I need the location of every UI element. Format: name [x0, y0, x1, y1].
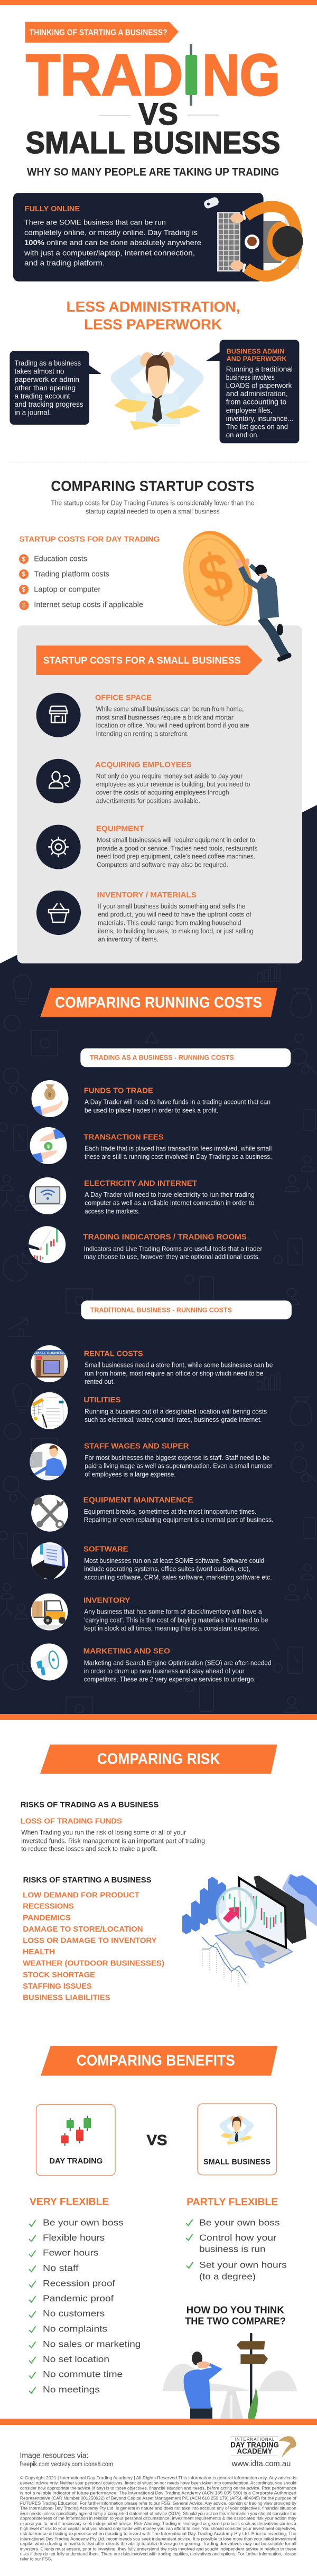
copyright disclaimer: FUTURES Trading Education. For further information please refer to our FSG. General Advice: Any advice, opinion or trading view provided by	[20, 2500, 297, 2506]
copyright disclaimer: appropriateness of the information in relation to your personal circumstance, investment requirements & the associated risk your action may	[20, 2516, 297, 2521]
item: inventory: INVENTORY	[83, 1596, 130, 1605]
item: acquiring employees	[36, 759, 250, 804]
icon: bills and pen	[31, 1392, 68, 1429]
intro text: startup capital needed to open a small business	[86, 508, 220, 515]
copyright disclaimer: expose you to, and if necessary seek independent advice. Risk Warning: Trading in leveraged or geared products such as derivatives carries a	[20, 2521, 296, 2526]
callout: trading paperwork: Trading as a business	[15, 359, 81, 367]
title: vs: VS	[138, 97, 178, 132]
item: inventory	[31, 1594, 268, 1632]
item: rental costs: RENTAL COSTS	[84, 1350, 143, 1359]
item: acquiring employees: employees as your revenue is building, but you need to	[96, 781, 250, 788]
callout: trading paperwork: takes almost no	[15, 368, 64, 376]
block: risks of starting a business: WEATHER (OUTDOOR BUSINESSES)	[23, 1959, 164, 1968]
item: office space: location or office. You will need upfront bond if you are	[96, 722, 249, 729]
label: trading running costs: TRADING AS A BUSINESS - RUNNING COSTS	[90, 1054, 234, 1062]
icon: gear	[36, 825, 81, 869]
body text: business involves	[226, 373, 275, 381]
block: risks of starting a business: BUSINESS LIABILITIES	[23, 1993, 110, 2002]
checklist: day trading benefits: No complaints	[43, 2324, 107, 2334]
body text: with just a computer/laptop, internet connection,	[24, 249, 195, 257]
body text: Running a traditional	[226, 365, 293, 373]
card: day trading: DAY TRADING	[49, 2157, 102, 2166]
item: inventory: Any business that has some form of stock/inventory will have a	[84, 1608, 262, 1616]
orange footer bar	[0, 2419, 317, 2425]
block: risks of trading: When Trading you run the risk of losing some or all of your	[21, 1829, 186, 1837]
heading: startup costs for day trading: STARTUP COSTS FOR DAY TRADING	[19, 536, 160, 544]
checklist: small business benefits	[186, 2217, 287, 2282]
body text	[24, 219, 201, 267]
orange divider bar	[0, 1714, 317, 1720]
item: inventory materials: end product, you will need to have the upfront costs of	[98, 911, 251, 919]
block: risks of starting a business: DAMAGE TO STORE/LOCATION	[23, 1925, 143, 1934]
banner: small business costs	[36, 645, 263, 675]
panel: startup costs for a small business	[17, 625, 302, 963]
icon: money bag in hand	[31, 1080, 69, 1119]
icon: basket	[36, 891, 81, 935]
list: day trading startup costs: Trading platform costs	[34, 570, 109, 579]
body text: and administration,	[226, 390, 288, 398]
item: electricity and internet: computer as well as a reliable internet connection in order to	[85, 1200, 254, 1207]
checklist: day trading benefits: No commute time	[43, 2369, 123, 2380]
heading: fully online: FULLY ONLINE	[25, 205, 80, 213]
block: risks of trading: RISKS OF TRADING AS A BUSINESS	[21, 1801, 158, 1810]
item: inventory materials: items, to building houses, to making food, or just selling	[98, 928, 254, 935]
callout: trading paperwork: other than opening	[15, 384, 76, 392]
item: staff wages and super: paid a living wage as well as superannuation. Even a small number	[85, 1463, 273, 1470]
item: software: include operating systems, office suites (word outlook, etc),	[84, 1566, 250, 1573]
item: marketing and seo: MARKETING AND SEO	[83, 1647, 170, 1656]
label: traditional running costs: TRADITIONAL BUSINESS - RUNNING COSTS	[90, 1306, 232, 1314]
item: trading indicators and rooms: Indicators and Live Trading Rooms are useful tools that a trader	[84, 1245, 262, 1252]
banner: comparing benefits: COMPARING BENEFITS	[77, 2052, 235, 2069]
heading: less administration	[67, 298, 240, 332]
header tag: THINKING OF STARTING A BUSINESS?	[30, 29, 167, 38]
item: rental costs	[31, 1345, 273, 1385]
item: inventory materials: If your small business builds something and sells the	[98, 903, 246, 910]
header tag	[25, 22, 179, 43]
item: equipment: Computers and software may also be required.	[97, 861, 228, 868]
logo: www.idta.com.au	[231, 2460, 291, 2468]
item: acquiring employees: Not only do you require money set aside to pay your	[96, 772, 243, 780]
copyright disclaimer: Representative (CAR Number 001250922) of Beyond Capital Asset Management P/L (ACN 610 259 179) (AFSL 484045) for the purpose of	[20, 2495, 297, 2500]
item: equipment: provide a good or service. Tradies need tools, restaurants	[97, 845, 257, 852]
item: inventory materials: materials. This could range from making household	[98, 919, 241, 926]
list: day trading startup costs: $	[22, 603, 26, 609]
icon: shop front: SMALL BUSINESS	[34, 1351, 65, 1355]
icon: candlesticks	[61, 2116, 91, 2146]
icon: money bag in hand: $	[48, 1092, 51, 1098]
item: software: SOFTWARE	[83, 1545, 128, 1554]
banner: comparing running costs: COMPARING RUNNING COSTS	[55, 994, 262, 1011]
item: marketing and seo	[31, 1644, 272, 1683]
item: office space: OFFICE SPACE	[95, 694, 152, 702]
block: risks of starting a business	[23, 1876, 164, 2002]
image credits: Image resources via:	[20, 2451, 89, 2460]
question heading: HOW DO YOU THINK	[187, 2305, 284, 2315]
item: trading indicators and rooms	[28, 1226, 262, 1263]
item: equipment: EQUIPMENT	[96, 825, 144, 833]
list: day trading startup costs: Education costs	[34, 555, 87, 564]
illustration: person at desk from above	[203, 196, 303, 276]
item: office space: While some small businesses can be run from home,	[96, 706, 244, 713]
logo: INTERNATIONAL	[235, 2437, 275, 2442]
heading: business admin: BUSINESS ADMIN	[227, 348, 284, 355]
item: staff wages and super	[30, 1442, 273, 1480]
item: software: accounting software, CRM, sales software, marketing software etc.	[84, 1573, 272, 1581]
item: inventory: kept in stock at all times, meaning this is a consistant expense.	[84, 1625, 259, 1632]
item: transaction fees: TRANSACTION FEES	[83, 1133, 164, 1141]
body text: 100% online and can be done absolutely anywhere	[24, 239, 201, 247]
checklist: day trading benefits: No staff	[43, 2263, 79, 2273]
body text: There are SOME business that can be run	[24, 219, 166, 227]
banner: comparing benefits	[41, 2046, 277, 2076]
title: trading	[26, 43, 280, 108]
item: inventory materials: INVENTORY / MATERIALS	[97, 891, 197, 900]
checklist: small business benefits: (to a degree)	[199, 2272, 256, 2282]
illustration: laptop chart and magnifier	[182, 1874, 317, 1987]
callout: trading paperwork: paperwork or admin	[15, 376, 79, 383]
body text: completely online, or mostly online. Day Trading is	[24, 229, 198, 237]
card: day trading	[36, 2104, 115, 2176]
checklist: small business benefits: Set your own hours	[199, 2260, 287, 2270]
list: day trading startup costs: $	[22, 557, 25, 563]
item: inventory materials: an inventory of items.	[98, 936, 158, 943]
icon: forklift	[31, 1594, 68, 1631]
icon: stressed man	[221, 2115, 253, 2144]
item: utilities: Running a business out of a designated location will bering costs	[85, 1408, 267, 1415]
body text: and a trading platform.	[24, 259, 105, 267]
icon: crossed wrenches	[31, 1495, 68, 1532]
icon: shop front	[31, 1345, 68, 1382]
icon: laptop with wifi	[29, 1177, 66, 1214]
checklist: day trading benefits: No sales or marketing	[43, 2339, 141, 2349]
body text: inventory, insurance...	[226, 415, 293, 423]
item: transaction fees: these are still a running cost involved in Day Trading as a business.	[85, 1153, 272, 1160]
banner: comparing risk	[40, 1745, 277, 1774]
item: funds to trade: A Day Trader will need to have funds in a trading account that can	[85, 1099, 271, 1106]
image credits: freepik.com vectezy.com icons8.com	[20, 2461, 113, 2468]
block: risks of starting a business: RECESSIONS	[23, 1902, 74, 1911]
heading: partly flexible: PARTLY FLEXIBLE	[187, 2196, 278, 2208]
item: marketing and seo: Marketing and Search Engine Optimisation (SEO) are often needed	[84, 1659, 272, 1666]
copyright disclaimer: risk tolerance & trading experience when deciding to invest with The International Day Trading Academy Pty Ltd. Prior to investing, The	[20, 2531, 296, 2536]
icon: people	[36, 759, 81, 803]
copyright disclaimer: risks if they do not fully understand them. There are risks involved with trading equities, derivatives and options. For further information, please	[20, 2551, 296, 2556]
copyright disclaimer: consider how appropriate the advice (if any) is to those objectives, financial situation and needs, before acting on the advice. Past performance	[20, 2485, 296, 2490]
checklist: day trading benefits: Be your own boss	[43, 2217, 124, 2227]
list: day trading startup costs: Internet setup costs if applicable	[34, 601, 143, 609]
item: rental costs: run from home, most require an office or shop which need to be	[85, 1370, 263, 1377]
icon: megaphone	[31, 1644, 68, 1681]
item: rental costs: Small businesses need a store front, while some businesses can be	[85, 1362, 273, 1369]
copyright disclaimer: refer to our FSG.	[20, 2556, 52, 2562]
icon: hands with coin	[30, 1127, 67, 1164]
checklist: day trading benefits	[29, 2217, 141, 2394]
item: utilities: such as electrical, water, council rates, business-grade internet.	[85, 1416, 262, 1423]
copyright disclaimer: high level of risk to your capital and you should only trade with money you can afford to lose. You should consider your investment objectives,	[20, 2526, 296, 2531]
checklist: small business benefits: Be your own boss	[199, 2217, 280, 2227]
checklist: small business benefits: Control how your	[199, 2233, 277, 2243]
block: risks of starting a business: RISKS OF STARTING A BUSINESS	[23, 1876, 152, 1885]
intro text: The startup costs for Day Trading Futures is considerably lower than the	[51, 500, 254, 507]
subtitle: WHY SO MANY PEOPLE ARE TAKING UP TRADING	[27, 166, 279, 179]
icon: mouse	[203, 196, 220, 210]
question heading: THE TWO COMPARE?	[185, 2316, 286, 2327]
copyright disclaimer: general advice only. Neither your personal objectives, financial situation nor needs have been taken into consideration. Accordingly, you should	[20, 2480, 296, 2486]
copyright disclaimer: &/or needs unless specifically agreed to by a completed statement of advice (SOA). Should you act on this information you should consider the	[20, 2511, 296, 2516]
banner: comparing running costs	[40, 988, 277, 1017]
panel: fully online	[13, 193, 264, 282]
block: risks of trading: LOSS OF TRADING FUNDS	[21, 1817, 122, 1825]
icon: candlestick chart	[28, 1226, 66, 1263]
block: risks of starting a business: PANDEMICS	[23, 1913, 71, 1922]
item: staff wages and super: STAFF WAGES AND SUPER	[84, 1442, 189, 1451]
item: electricity and internet: ELECTRICITY AND INTERNET	[84, 1179, 197, 1188]
heading: comparing startup costs: COMPARING STARTUP COSTS	[51, 477, 254, 494]
item: electricity and internet: access the markets.	[85, 1207, 139, 1215]
item: equipment maintanence	[31, 1495, 273, 1532]
item: equipment maintanence: Repairing or even replacing equipment is a normal part of business.	[84, 1516, 273, 1524]
block: risks of starting a business: LOW DEMAND FOR PRODUCT	[23, 1890, 139, 1899]
item: software: Most businesses run on at least SOME software. Software could	[84, 1557, 264, 1565]
banner: small business costs: STARTUP COSTS FOR A SMALL BUSINESS	[43, 655, 241, 666]
title: trading: I	[187, 48, 196, 107]
logo: ACADEMY	[237, 2448, 273, 2456]
list: day trading startup costs: Laptop or computer	[34, 585, 100, 594]
copyright disclaimer: is not a reliable indicator of future performance. The International Day Trading Academy (ACN 165 005 550) is a Corporate Authorized	[20, 2490, 296, 2496]
title: trading: NG	[202, 43, 280, 108]
item: funds to trade: FUNDS TO TRADE	[84, 1086, 153, 1095]
item: software	[31, 1542, 272, 1581]
item: inventory: 'carrying cost'. This is the cost of buying materials that need to be	[84, 1616, 268, 1624]
checklist: day trading benefits: No customers	[43, 2309, 105, 2319]
body text	[226, 365, 293, 439]
item: transaction fees: Each trade that is placed has transaction fees involved, while small	[85, 1145, 272, 1152]
copyright disclaimer: capital when dealing in markets that offer clients the ability to utilize leverage or gearing. Trading derivatives may not be suitable for all	[20, 2541, 296, 2546]
item: rental costs: rented out.	[85, 1378, 115, 1385]
item: office space	[36, 693, 249, 737]
illustration: person at signpost	[163, 2333, 297, 2419]
body text: on and on.	[226, 431, 259, 439]
block: risks of trading	[21, 1801, 205, 1853]
item: marketing and seo: in order to drum up new business and stay ahead of your	[84, 1668, 245, 1675]
heading: less administration: LESS PAPERWORK	[84, 316, 222, 332]
callout: trading paperwork	[10, 351, 101, 425]
block: risks of starting a business: LOSS OR DAMAGE TO INVENTORY	[23, 1936, 157, 1945]
callout: trading paperwork: in a journal.	[15, 409, 51, 417]
icon: hands with coin: $	[46, 1144, 50, 1150]
heading: less administration: LESS ADMINISTRATION,	[67, 298, 240, 315]
illustration: stressed man	[114, 350, 200, 430]
icon: store	[36, 693, 81, 737]
checklist: day trading benefits: Flexible hours	[43, 2233, 105, 2243]
heading: very flexible: VERY FLEXIBLE	[30, 2196, 109, 2207]
item: equipment maintanence: EQUIPMENT MAINTANENCE	[83, 1496, 193, 1505]
vs label: VS	[147, 2132, 167, 2148]
block: risks of trading: to reduce these losses and seek to make a profit.	[21, 1846, 157, 1853]
block: risks of starting a business: STOCK SHORTAGE	[23, 1970, 95, 1979]
icon: office worker	[30, 1443, 67, 1480]
copyright disclaimer: investors. Clients must ensure, prior to investing, they fully understand the risks involved and sought independent advice in relation to these	[20, 2546, 296, 2551]
card: small business: SMALL BUSINESS	[203, 2158, 271, 2167]
icon: laptop with invoice	[31, 1542, 68, 1580]
illustration: man pushing coin	[172, 522, 292, 662]
question heading	[185, 2305, 286, 2327]
item: utilities: UTILITIES	[83, 1396, 121, 1404]
item: transaction fees	[30, 1127, 272, 1164]
card: small business	[198, 2104, 277, 2175]
banner: comparing risk: COMPARING RISK	[97, 1750, 220, 1767]
item: electricity and internet	[29, 1177, 255, 1215]
item: utilities	[31, 1392, 267, 1429]
callout: trading paperwork: a trading account	[15, 392, 70, 400]
body text: The list goes on and	[226, 423, 288, 431]
item: acquiring employees: advertisments for positions available.	[96, 797, 200, 804]
item: trading indicators and rooms: TRADING INDICATORS / TRADING ROOMS	[83, 1233, 247, 1242]
intro text	[51, 500, 254, 515]
checklist: day trading benefits: Recession proof	[43, 2278, 115, 2288]
checklist: day trading benefits: Fewer hours	[43, 2248, 98, 2258]
item: inventory materials	[36, 891, 254, 943]
item: equipment	[36, 825, 257, 869]
checklist: day trading benefits: Pandemic proof	[43, 2293, 114, 2303]
top orange bar	[0, 0, 317, 5]
title: trading: TRAD	[26, 43, 183, 108]
item: office space: most small businesses require a brick and mortar	[96, 714, 234, 721]
item: marketing and seo: competitors. These are 2 very expensive services to undergo.	[84, 1676, 256, 1683]
item: electricity and internet: A Day Trader will need to have electricity to run their trading	[85, 1191, 255, 1198]
checklist: small business benefits: business is run	[199, 2244, 265, 2254]
dark running costs background	[0, 805, 317, 1714]
item: staff wages and super: For most businesses the biggest expense is staff. Staff need to be	[85, 1454, 270, 1462]
callout: trading paperwork: and tracking progress	[15, 400, 83, 408]
label: traditional running costs	[81, 1300, 292, 1319]
list: day trading startup costs: $	[22, 572, 25, 578]
copyright disclaimer: The International Day Trading Academy Pty Ltd. is general in nature and does not take into account any of your objectives, financial situation	[20, 2506, 296, 2511]
illustration: man pushing coin: $	[192, 538, 239, 614]
checklist: day trading benefits: No meetings	[43, 2384, 100, 2394]
item: equipment: need food prep equipment, cafe's need coffee machines.	[97, 853, 255, 860]
block: risks of starting a business: HEALTH	[23, 1947, 55, 1956]
body text: employee files,	[226, 406, 273, 414]
label: trading running costs	[80, 1048, 291, 1067]
title: small business: SMALL BUSINESS	[25, 126, 280, 160]
item: acquiring employees: ACQUIRING EMPLOYEES	[95, 761, 192, 769]
item: funds to trade: be used to place trades in order to seek a profit.	[85, 1107, 218, 1114]
list: day trading startup costs: $	[22, 587, 25, 593]
copyright disclaimer	[20, 2475, 297, 2562]
logo	[230, 2436, 296, 2468]
copyright disclaimer: © Copyright 2021 | International Day Trading Academy | All Rights Reserved This information is general information only. Any advice is	[20, 2475, 296, 2480]
item: funds to trade	[31, 1080, 271, 1119]
callout: business admin and paperwork	[206, 340, 299, 443]
body text: from accounting to	[226, 398, 286, 406]
logo: DAY TRADING	[230, 2441, 279, 2449]
body text: LOADS of paperwork	[226, 381, 292, 390]
copyright disclaimer: International Day Trading Academy Pty Ltd. recommends you seek independent advice. It is possible to lose more than your initial investment	[20, 2536, 296, 2541]
icon: coffee	[245, 235, 259, 249]
heading: business admin: AND PAPERWORK	[227, 355, 287, 362]
checklist: day trading benefits: No set location	[43, 2354, 109, 2364]
item: staff wages and super: of employees is a large expense.	[85, 1470, 176, 1478]
item: trading indicators and rooms: may choose to use, however they are optional additional costs.	[84, 1253, 260, 1261]
icon: candlestick	[185, 44, 197, 106]
heading: business admin	[227, 348, 287, 362]
item: equipment maintanence: Equipment breaks, sometimes at the most innoportune times.	[84, 1508, 256, 1515]
item: equipment: Most small businesses will require equipment in order to	[97, 837, 255, 844]
block: risks of starting a business: STAFFING ISSUES	[23, 1982, 92, 1991]
image credits	[20, 2451, 113, 2468]
item: acquiring employees: cover the costs of acquiring employees through	[96, 789, 229, 797]
block: risks of trading: inversted funds. Risk management is an important part of trading	[21, 1837, 205, 1844]
list: day trading startup costs	[19, 554, 143, 610]
item: office space: intending on renting a storefront.	[96, 730, 189, 737]
